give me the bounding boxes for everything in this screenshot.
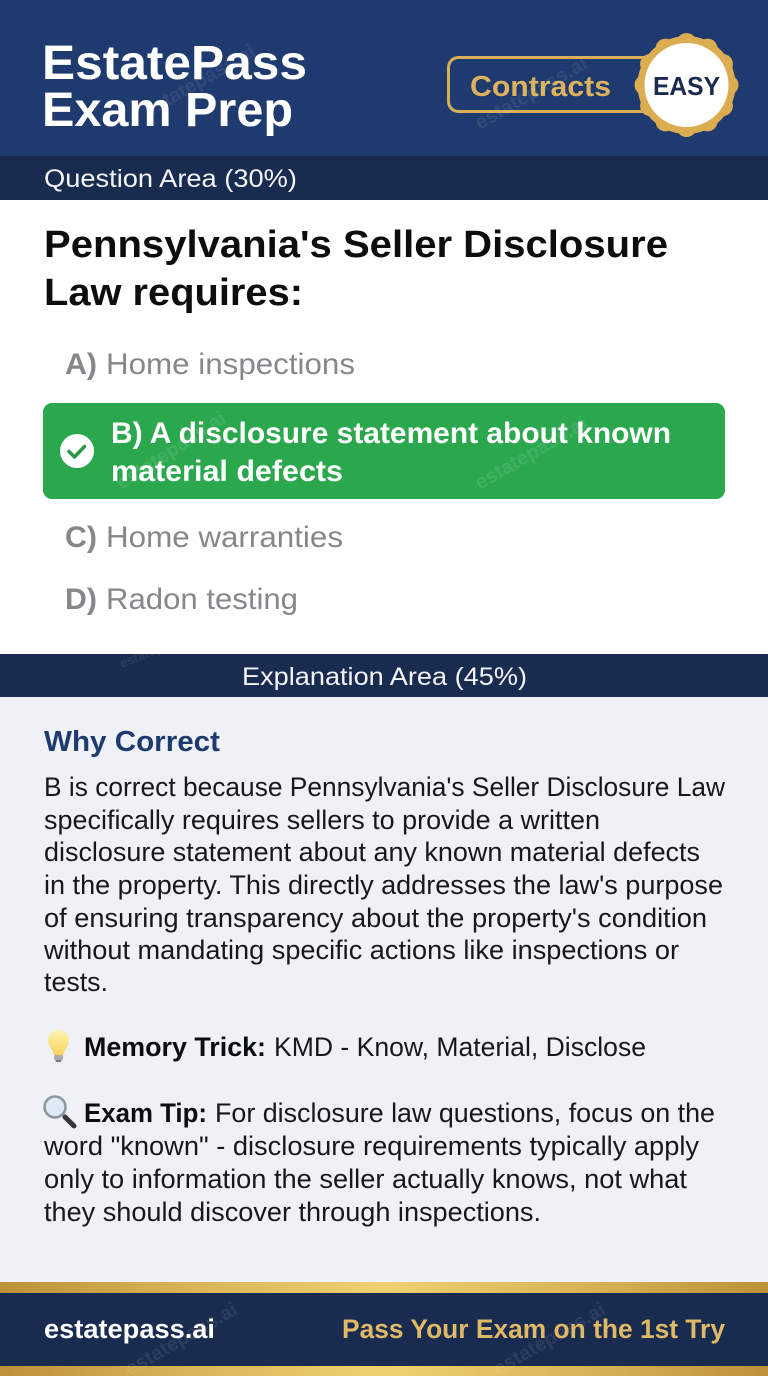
title (42, 37, 307, 137)
option B: correct answer: material defects (111, 455, 343, 488)
heading: Why Correct: Why Correct (44, 726, 220, 758)
footer site name: estatepass.ai (44, 1314, 215, 1344)
header band: estatepass.ai (472, 52, 591, 134)
icon: magnifying glass (44, 1096, 74, 1126)
option B: correct answer: B) A disclosure statement about known (111, 417, 671, 450)
option D: Radon testing (106, 583, 298, 616)
option D: D) (65, 583, 97, 616)
option C: C) (65, 521, 97, 554)
question heading (44, 224, 668, 314)
icon: light bulb (48, 1030, 69, 1062)
question area label bar (0, 156, 768, 200)
category badge: Contracts (448, 58, 664, 112)
explanation area label bar: Explanation Area (45%) (242, 663, 527, 691)
option B: correct answer: estatepass.ai (472, 412, 591, 494)
explanation paragraph: in the property. This directly addresses the law's purpose (44, 870, 723, 900)
question heading: Law requires: (44, 272, 303, 314)
category badge: Contracts: Contracts (470, 71, 611, 103)
exam tip: word "known" - disclosure requirements typically apply (43, 1131, 700, 1161)
exam tip: only to information the seller actually knows, not what (44, 1164, 687, 1194)
explanation paragraph: tests. (44, 967, 108, 997)
explanation paragraph: B is correct because Pennsylvania's Seller Disclosure Law (44, 772, 725, 802)
footer (0, 1282, 768, 1376)
memory trick (48, 1030, 646, 1062)
explanation panel (0, 697, 768, 1282)
option C: Home warranties (106, 521, 343, 554)
question heading: Pennsylvania's Seller Disclosure (44, 224, 668, 266)
question panel (0, 200, 768, 654)
difficulty seal: EASY: EASY (653, 71, 720, 101)
difficulty seal: EASY (634, 33, 738, 137)
title: Exam Prep (42, 84, 293, 137)
explanation paragraph: specifically requires sellers to provide a written (44, 805, 600, 835)
option B: correct answer (43, 403, 725, 499)
explanation paragraph (43, 772, 725, 997)
option A: Home inspections (106, 348, 355, 381)
explanation paragraph: without mandating specific actions like inspections or (43, 935, 679, 965)
exam tip: For disclosure law questions, focus on the (215, 1098, 715, 1128)
explanation area label bar (0, 626, 768, 697)
explanation paragraph: of ensuring transparency about the property's condition (44, 903, 707, 933)
footer tagline: Pass Your Exam on the 1st Try (342, 1314, 725, 1344)
exam tip (43, 1096, 715, 1227)
question area label bar: Question Area (30%) (44, 165, 297, 193)
explanation area label bar: estatepass.ai (118, 626, 199, 671)
title: EstatePass (42, 37, 307, 90)
header band: estatepass.ai (140, 40, 259, 122)
memory trick: Memory Trick: (84, 1032, 266, 1062)
explanation paragraph: disclosure statement about any known material defects (44, 837, 700, 867)
exam tip: they should discover through inspections. (44, 1197, 541, 1227)
exam tip: Exam Tip: (84, 1098, 207, 1128)
icon: check mark (60, 434, 94, 468)
option A: A) (65, 348, 97, 381)
option B: correct answer: estatepass.ai (113, 407, 230, 494)
header band (0, 0, 768, 156)
memory trick: KMD - Know, Material, Disclose (274, 1032, 646, 1062)
